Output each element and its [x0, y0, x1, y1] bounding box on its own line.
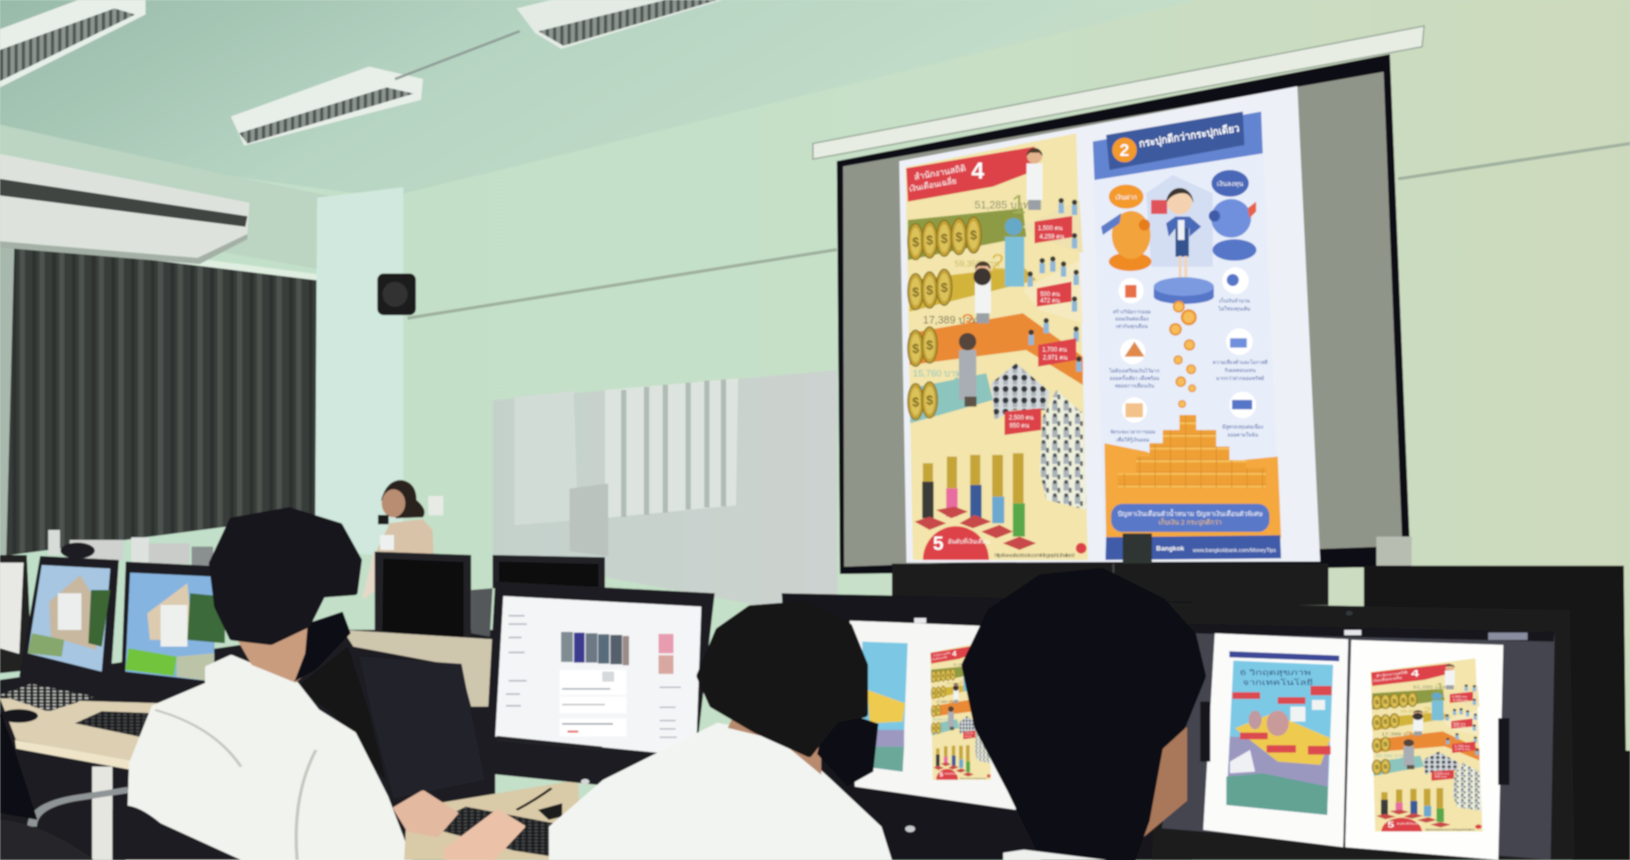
benefit captions right: ออมตามใจฉัน	[1227, 432, 1259, 439]
summary box	[1111, 504, 1269, 532]
ceiling light 3	[517, 0, 722, 49]
benefit captions right: ไม่ใช่ลงทุนเดิม	[1217, 306, 1250, 313]
salary thumbnail	[1371, 658, 1483, 831]
whiteboard	[493, 370, 837, 620]
screen foot tag	[1123, 533, 1152, 564]
keyboard at main desk	[426, 807, 554, 857]
technology infographic thumbnail: จากเทคโนโลยี	[1242, 678, 1313, 686]
benefit icons right	[1222, 267, 1256, 418]
ceiling light 2	[231, 67, 423, 146]
ribbon header	[1093, 112, 1263, 180]
orange hill	[1104, 443, 1281, 538]
summary box: เก็บเงิน 2 กระปุกดีกว่า	[1158, 518, 1222, 527]
benefit captions left: ออมครั้งเดียว เมื่อพร้อม	[1109, 373, 1159, 382]
left page: salary thumbnail	[930, 642, 991, 780]
hand left	[396, 793, 455, 835]
webcam dot	[1346, 611, 1353, 616]
lower right wall and dark cabinet	[1572, 749, 1630, 860]
left monitor edge	[0, 555, 32, 673]
benefit captions right	[1213, 297, 1268, 439]
white keyboard	[0, 684, 95, 712]
benefit captions left: สร้างวินัยการออม	[1113, 308, 1151, 315]
benefit captions right: มากกว่าฝากออมทรัพย์	[1216, 375, 1264, 382]
dark floor under desks	[0, 630, 495, 860]
benefit captions left: ทยอยการเลื่อนเงิน	[1115, 382, 1155, 389]
benefit captions left: ไม่ต้องเตรียมเงินไว้มาก	[1108, 368, 1160, 375]
sidebar pictures	[658, 634, 681, 738]
large right monitors	[782, 593, 1575, 860]
distant monitors row	[48, 530, 213, 567]
main large monitor	[1152, 603, 1575, 860]
student two shirt	[549, 723, 892, 860]
conduit pipe	[395, 31, 520, 79]
mouse	[0, 709, 38, 723]
projected slide	[899, 86, 1320, 563]
foreground chair left	[0, 820, 94, 860]
footer bar	[1105, 535, 1281, 560]
left large monitor	[782, 593, 1192, 860]
student three hair	[968, 574, 1200, 860]
benefit captions left	[1108, 308, 1160, 443]
benefit icons left	[1118, 278, 1147, 423]
projector screen casing	[813, 26, 1424, 159]
student one shirt folds	[155, 710, 316, 860]
taskbar	[497, 736, 602, 751]
ribbon title: กระปุกดีกว่ากระปุกเดียว	[1138, 122, 1240, 151]
main desk	[404, 780, 581, 860]
summary box: ปัญหาเงินเดือนตัวน้ำหนาม ปัญหาเงินเดือนตัวพิเศษ	[1118, 509, 1263, 518]
far back monitor row right	[892, 564, 1626, 751]
left book page	[1203, 633, 1348, 847]
wall rail	[408, 144, 1630, 318]
ceiling	[0, 0, 1195, 198]
left bank of computers	[0, 480, 715, 860]
screen black frame	[837, 54, 1411, 574]
second chair	[297, 647, 385, 780]
bank building outline	[1146, 175, 1213, 267]
student two	[549, 605, 892, 860]
student one neck	[236, 623, 316, 683]
student one shirt	[128, 657, 410, 860]
pile of coins	[1118, 415, 1266, 488]
wall thermostat	[428, 496, 443, 515]
black monitor	[375, 552, 471, 660]
left page: blue infographic	[862, 642, 908, 772]
ribbon header: 2	[1120, 140, 1129, 160]
left viewer toolbar	[914, 618, 926, 623]
chair base	[32, 790, 128, 827]
desk with keyboards	[0, 698, 161, 860]
footer bar: Bangkok	[1156, 546, 1185, 553]
hand right	[447, 812, 522, 858]
wall column	[315, 187, 403, 556]
blue platform	[1154, 277, 1214, 304]
blue piggy bank: เงินลงทุน	[1217, 180, 1244, 188]
falling coins	[1169, 301, 1197, 408]
right infographic: two piggy banks	[1093, 112, 1281, 560]
benefit captions left: ออมเงินต่อเนื่อง	[1115, 316, 1149, 323]
air conditioner	[0, 154, 249, 264]
story thumbnails	[561, 632, 629, 665]
dark keyboard	[75, 711, 154, 737]
hp logo	[581, 779, 589, 784]
left viewer pages	[850, 621, 1016, 810]
viewer background	[1162, 623, 1555, 860]
technology infographic thumbnail: 6 วิกฤตสุขภาพ	[1240, 668, 1311, 677]
browser screen	[495, 596, 701, 757]
cable	[517, 788, 551, 810]
student two hair	[701, 605, 864, 753]
browser left nav	[506, 615, 527, 707]
orange piggy bank: เงินฝาก	[1115, 193, 1137, 201]
benefit captions right: มีสูตรลงทุนต่อเนื่อง	[1222, 424, 1264, 431]
desktop monitor showing campus wallpaper	[19, 556, 119, 693]
curtain	[0, 233, 320, 556]
student three face edge	[1118, 718, 1187, 860]
student three collar	[1003, 850, 1107, 860]
right book page	[1345, 640, 1503, 860]
screen grey surface	[843, 72, 1402, 567]
hp logo left	[905, 826, 915, 832]
second black monitor	[471, 555, 605, 637]
projection screen	[837, 54, 1412, 574]
student three	[968, 574, 1200, 860]
side arrow right	[1498, 718, 1509, 785]
slide contents	[906, 112, 1281, 560]
student one hair	[213, 510, 358, 642]
presenter	[362, 480, 434, 600]
benefit captions left: เพื่อให้รู้เงินออม	[1116, 436, 1149, 443]
feed card	[559, 670, 626, 737]
blue piggy bank	[1209, 170, 1256, 261]
side arrow left	[1200, 702, 1210, 762]
foreground chair	[112, 805, 241, 860]
ceiling light 1	[0, 0, 146, 87]
benefit captions right: ความเสี่ยงต่ำและโอกาสดี	[1213, 359, 1268, 366]
desktop monitor with green lawn	[120, 562, 225, 697]
technology infographic thumbnail	[1226, 661, 1333, 815]
woman presenter	[1151, 188, 1201, 279]
benefit captions right: เก็บเงินจำนวน	[1219, 297, 1250, 305]
benefit captions right: รับผลตอบแทน	[1225, 368, 1256, 374]
student one mask	[294, 612, 351, 682]
viewer toolbar	[1188, 623, 1555, 642]
footer bar: www.bangkokbank.com/MoneyTips	[1193, 548, 1276, 554]
speaker	[377, 273, 416, 315]
orange piggy bank	[1101, 185, 1151, 271]
left infographic: salary ranking	[906, 133, 1088, 560]
office chair behind	[360, 657, 485, 798]
student two mask	[817, 707, 878, 786]
left page heading bar	[1229, 651, 1339, 661]
left wall	[0, 125, 338, 272]
desk far	[343, 630, 503, 707]
phone	[538, 803, 562, 820]
left dark chair	[0, 710, 37, 820]
main monitor	[485, 582, 715, 790]
benefit captions left: เท่ากันทุกเดือน	[1116, 323, 1148, 330]
benefit captions left: จัดระยะเวลาการออม	[1110, 429, 1155, 435]
student two neck	[728, 718, 821, 775]
